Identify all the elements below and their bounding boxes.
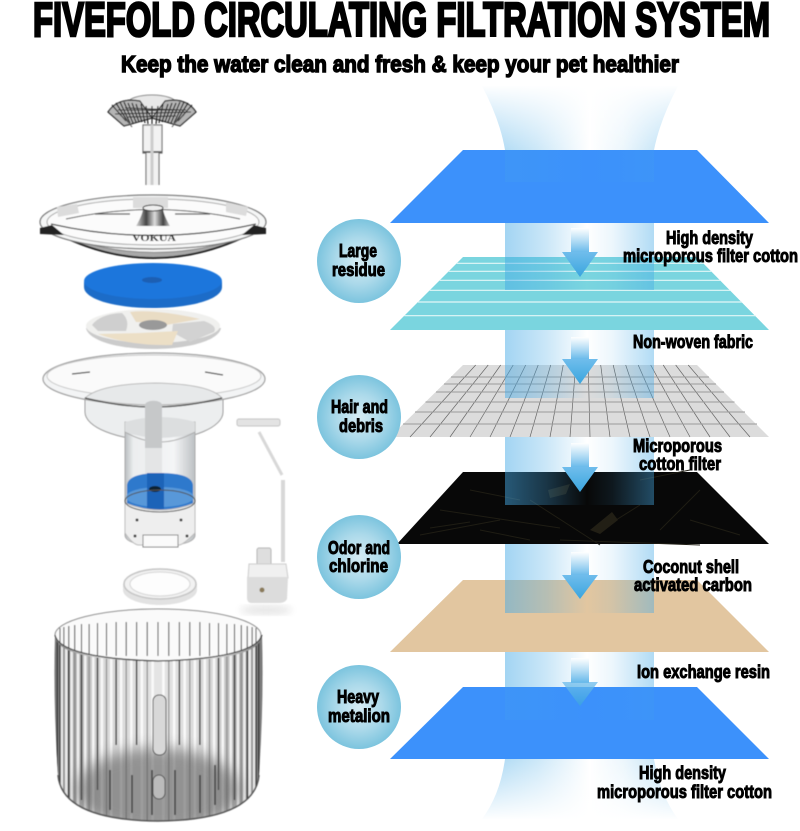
layer: coconut shell activated carbon [397,470,769,545]
arrow 2 [562,337,598,384]
label: coconut shell activated carbon: Coconut shell [643,557,739,577]
arrow 3 [562,443,598,492]
circle label: heavy metal ion: Heavy [337,687,379,707]
icon: ribbed water tank [54,609,263,831]
exploded fountain illustration [40,95,292,831]
brand label: VOKUA [132,233,177,243]
icon: top tray [40,195,266,258]
circle label: odor and chlorine [317,515,401,599]
label: coconut shell activated carbon [634,557,752,595]
circle label: odor and chlorine: Odor and [328,538,390,558]
label: microporous cotton filter: Microporous [633,436,722,456]
water column: bottom flare [480,759,680,820]
label: coconut shell activated carbon: activated carbon [634,575,752,595]
circle label: large residue: Large [339,241,377,261]
circle label: hair and debris: debris [339,416,383,436]
icon: water pump [240,548,292,615]
icon: base ring [123,569,197,605]
circle label: odor and chlorine: chlorine [329,556,388,576]
label: high density microporous filter cotton (bottom): High density [639,763,726,783]
label: ion exchange resin: Ion exchange resin [637,662,770,682]
icon: blue sponge filter [84,263,222,308]
label: non-woven fabric: Non-woven fabric [633,332,753,352]
circle label: large residue: residue [332,260,385,280]
layer: non-woven fabric [390,257,769,330]
layer: high density filter cotton (top) [390,150,769,223]
arrow 5 [562,658,598,706]
circle label: heavy metal ion: metalion [328,706,390,726]
icon: flower spout [108,95,196,185]
label: microporous cotton filter: cotton filter [639,454,721,474]
icon: water tube [237,419,283,562]
water column: top flare [480,85,680,151]
water column segments [505,150,654,720]
circle label: large residue [317,219,401,303]
label: high density microporous filter cotton (bottom) [597,763,772,802]
layer: microporous cotton filter [390,365,769,437]
arrow 1 [562,228,598,277]
subtitle: Keep the water clean and fresh & keep your pet healthier [121,51,679,77]
dark ribs [57,640,259,805]
icon: reservoir lid and filter cup [43,353,265,547]
icon: filter plate [86,309,221,349]
layer: high density filter cotton (bottom) [390,687,769,759]
circle label: hair and debris [317,375,401,459]
label: high density microporous filter cotton (top): High density [666,228,753,248]
grey ribs [74,653,242,820]
white rib highlights [62,640,254,825]
circle label: hair and debris: Hair and [331,397,388,417]
panel: filter layer stack [390,85,769,820]
bottom water shading [76,748,240,831]
layer: ion exchange resin [390,580,769,652]
label: high density microporous filter cotton (top) [623,228,798,266]
label: microporous cotton filter [633,436,722,474]
circle label: heavy metal ion [317,665,401,749]
arrow 4 [562,552,598,599]
